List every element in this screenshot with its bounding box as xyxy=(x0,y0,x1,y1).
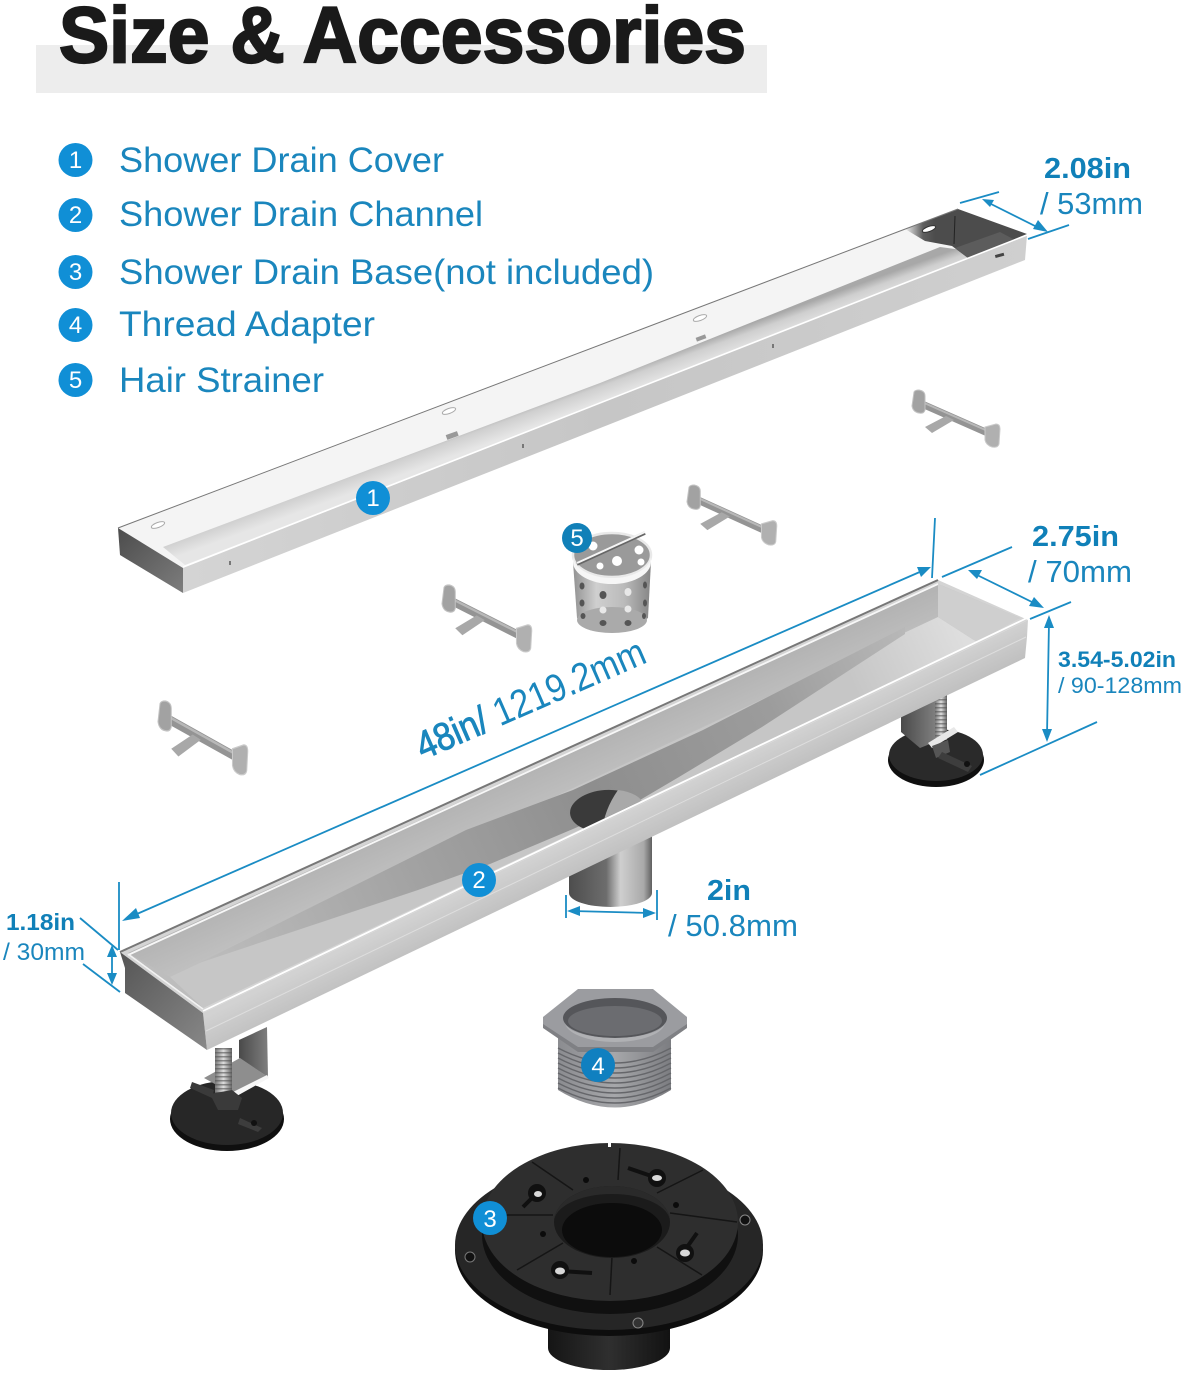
clip 2 xyxy=(687,485,777,545)
dimension: height 3.54-5.02in xyxy=(980,615,1182,775)
dimension: channel width 2.75in: / 70mm xyxy=(1028,554,1132,589)
outlet pipe xyxy=(569,815,652,907)
badge 5 xyxy=(562,523,592,553)
legend item 5: 5 xyxy=(69,367,82,394)
badge 1: 1 xyxy=(366,485,380,512)
badge 3: 3 xyxy=(483,1206,497,1233)
legend item 1: 1 xyxy=(69,147,82,174)
badge 2: 2 xyxy=(472,867,486,894)
keyhole slots xyxy=(523,1168,697,1279)
left foot xyxy=(170,1027,284,1151)
dimension: outlet 2in xyxy=(566,875,798,943)
shower drain channel xyxy=(120,580,1028,1050)
dimension: height 3.54-5.02in: 3.54-5.02in xyxy=(1058,647,1176,672)
shower drain base xyxy=(455,1141,763,1370)
badge 1 xyxy=(356,481,390,515)
clip 4 xyxy=(158,701,248,775)
drain hole xyxy=(570,790,642,828)
dimension: channel width 2.75in xyxy=(942,521,1132,619)
clip 3 xyxy=(442,585,532,652)
shower drain cover xyxy=(118,209,1027,593)
dimension: depth 1.18in: 1.18in xyxy=(6,909,75,935)
dimension: length 48in xyxy=(119,518,935,950)
legend item 3: 3 xyxy=(69,259,82,286)
badge 2 xyxy=(462,863,496,897)
legend item 4: Thread Adapter xyxy=(119,305,375,344)
legend item 3: Shower Drain Base(not included) xyxy=(119,253,654,292)
dimension: height 3.54-5.02in: / 90-128mm xyxy=(1058,673,1182,698)
dimension: depth 1.18in: / 30mm xyxy=(3,939,85,966)
dimension: length 48in: 48in/ 1219.2mm xyxy=(409,631,652,768)
mounting clips xyxy=(158,390,1000,775)
center opening xyxy=(554,1186,670,1258)
legend item 2: 2 xyxy=(69,202,82,229)
badge 4 xyxy=(581,1048,615,1082)
dimension: channel width 2.75in: 2.75in xyxy=(1032,521,1119,553)
badge 4: 4 xyxy=(591,1053,605,1080)
clip 1 xyxy=(912,390,1000,447)
dimension: cover width 2.08in xyxy=(960,153,1143,239)
dimension: cover width 2.08in: / 53mm xyxy=(1040,186,1143,221)
legend item 1: Shower Drain Cover xyxy=(119,141,444,180)
legend: parts list xyxy=(58,141,654,400)
legend item 2: Shower Drain Channel xyxy=(119,195,483,234)
dimension: outlet 2in: 2in xyxy=(707,875,751,907)
thread adapter xyxy=(543,989,687,1108)
dimension: outlet 2in: / 50.8mm xyxy=(668,908,798,943)
dimension: depth 1.18in xyxy=(3,909,120,992)
legend item 4: 4 xyxy=(69,312,82,339)
badge 5: 5 xyxy=(570,525,584,552)
badge 3 xyxy=(473,1201,507,1235)
legend item 5: Hair Strainer xyxy=(119,361,324,400)
right foot xyxy=(888,680,984,787)
dimension: cover width 2.08in: 2.08in xyxy=(1044,153,1131,185)
hair strainer xyxy=(573,532,651,633)
